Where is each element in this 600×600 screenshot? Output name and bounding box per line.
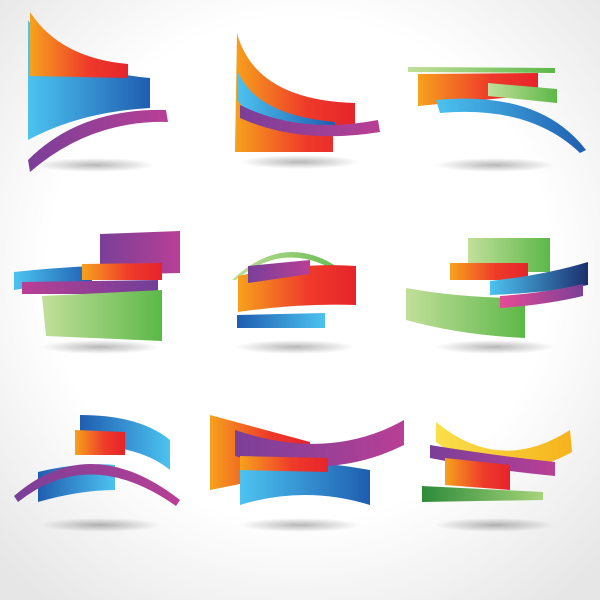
logo 4 [14, 231, 180, 354]
logo 9 [422, 422, 572, 532]
logo 5 [232, 252, 356, 354]
logo 1 [28, 12, 168, 172]
logo 2 [235, 33, 380, 169]
logo 7 [14, 415, 180, 532]
logo 3 [408, 67, 586, 172]
logo 8 [210, 415, 404, 532]
logo 6 [406, 238, 588, 354]
